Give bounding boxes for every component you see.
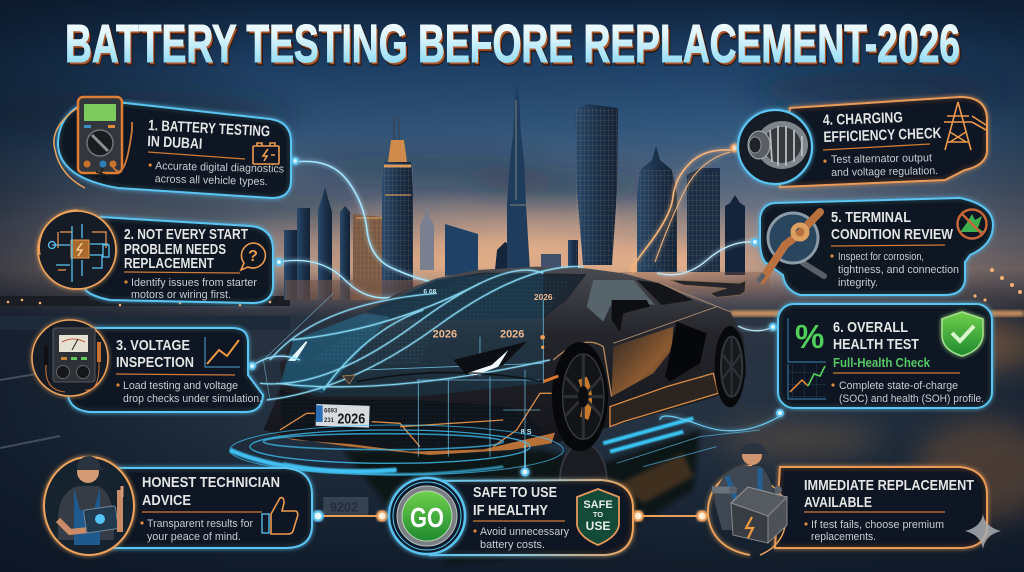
icon: safe to use shield [577,489,619,545]
icon: alternator [748,121,808,169]
heading: 3. VOLTAGE [116,337,190,354]
heading: PROBLEM NEEDS [124,241,226,258]
heading: 1. BATTERY TESTING [148,117,271,140]
energy links behind car [279,150,755,298]
energy links from panels to car [252,326,780,470]
heading: HEALTH TEST [833,336,919,353]
hologram 2026 labels: 2026 [500,328,524,340]
icon: health chart [788,364,826,399]
heading: IN DUBAI [147,133,203,153]
text: your peace of mind. [147,531,241,543]
text: (SOC) and health (SOH) profile. [839,393,984,405]
text: Complete state-of-charge [839,380,958,392]
spoiler [670,280,746,297]
heading [147,117,271,156]
text: replacements. [811,531,876,543]
text [823,152,938,179]
icon: question bubble [241,243,265,270]
heading [804,477,974,511]
icon: no corrosion sign [958,210,986,238]
icon: battery [253,143,279,164]
heading [831,209,954,243]
subheading: Full-Health Check [833,355,931,370]
text: Identify issues from starter [131,277,257,289]
panel: safe to use if healthy [389,478,633,555]
text: Accurate digital diagnostics [155,160,285,176]
text: battery costs. [480,539,545,551]
windshield [367,273,587,321]
license plate: 6693 [324,409,338,415]
heading: INSPECTION [116,354,194,371]
hologram 2026 labels: 6 08 [423,288,437,295]
front wheel [552,342,608,451]
heading: EFFICIENCY CHECK [823,125,942,146]
heading: SAFE TO USE [473,484,557,501]
icon: magnifier on terminal clamp [758,212,824,282]
car reflection: 9202 [330,501,358,515]
panel: immediate replacement available [708,443,987,555]
license plate [316,404,370,428]
front bumper grille [280,390,543,450]
hologram 2026 labels [423,288,553,436]
license plate: 231 [324,418,335,424]
holographic blue overlay [260,266,583,457]
heading: CONDITION REVIEW [831,226,954,243]
skyline: Dubai towers [284,83,770,300]
icon: voltmeter [46,328,99,392]
heading: IF HEALTHY [473,502,548,519]
panel 1: battery testing in Dubai [54,97,291,198]
heading [833,319,919,353]
icon: technician with tablet [58,456,122,545]
text [831,380,984,405]
icon: circuit board [48,224,109,282]
car reflection [323,418,760,563]
ground scan rings [230,425,563,475]
car body [263,267,747,455]
heading: REPLACEMENT [124,255,214,272]
icon: safe to use shield: SAFE [583,499,613,511]
car: black supercar with holographic scan [230,266,760,563]
icon: question bubble: ? [248,248,258,265]
text: Load testing and voltage [123,380,238,392]
icon: percent: % [795,318,824,355]
icon: percent [788,318,826,362]
side windows and mirror [587,280,655,322]
icon: safe to use shield: TO [593,510,603,519]
orange trim lines [263,430,555,455]
panel 6: overall health test [778,304,992,408]
text [148,160,285,189]
text [473,526,569,551]
icon: green shield [942,312,983,356]
heading: IMMEDIATE REPLACEMENT [804,477,974,494]
panel 2: not every start problem [38,210,273,303]
icon: line chart [205,337,240,367]
text: If test fails, choose premium [811,519,944,531]
text [116,380,262,405]
connector nodes [249,144,783,476]
text [140,518,253,543]
side panel reflection [612,327,673,397]
bottom connectors [314,512,706,520]
icon: multimeter [78,97,132,182]
icon: thumbs up [262,498,298,534]
text: tightness, and connection [838,264,959,276]
text: and voltage regulation. [831,165,938,179]
hologram 2026 labels: 2026 [534,292,553,302]
text [830,251,959,289]
text [804,519,944,543]
heading [823,108,942,146]
text [124,277,257,301]
icon: sparkle watermark [965,514,1001,549]
text: integrity. [838,277,878,289]
heading: 6. OVERALL [833,319,908,336]
text: Avoid unnecessary [480,526,569,538]
icon: technician with battery [712,443,787,543]
badge [343,375,355,384]
heading: 5. TERMINAL [831,209,911,226]
panel 3: voltage inspection [32,320,263,412]
heading [142,474,280,509]
icon: power pylon [944,102,986,150]
license plate: 2026 [337,411,365,427]
hologram 2026 labels: 8 S [521,427,532,436]
heading [116,337,194,371]
panel 5: terminal condition review [758,198,993,295]
heading: AVAILABLE [804,494,872,511]
text: Inspect for corrosion, [838,251,924,263]
icon: safe to use shield: USE [586,519,610,533]
heading: 2. NOT EVERY START [124,226,248,243]
heading [473,484,557,519]
panel: honest technician advice [44,456,312,555]
heading [124,226,248,272]
heading: HONEST TECHNICIAN [142,474,280,491]
text: across all vehicle types. [155,173,268,188]
heading: ADVICE [142,492,191,509]
panel 4: charging efficiency check [738,97,987,187]
text: motors or wiring first. [131,289,231,301]
text: Test alternator output [831,152,932,166]
text: Transparent results for [147,518,253,530]
hologram 2026 labels: 2026 [433,328,457,340]
headlights [453,342,527,375]
text: drop checks under simulation. [123,393,262,405]
rear wheel [715,326,745,407]
icon: GO button: GO [410,502,444,533]
icon: GO button [389,478,465,554]
heading: 4. CHARGING [823,109,903,129]
